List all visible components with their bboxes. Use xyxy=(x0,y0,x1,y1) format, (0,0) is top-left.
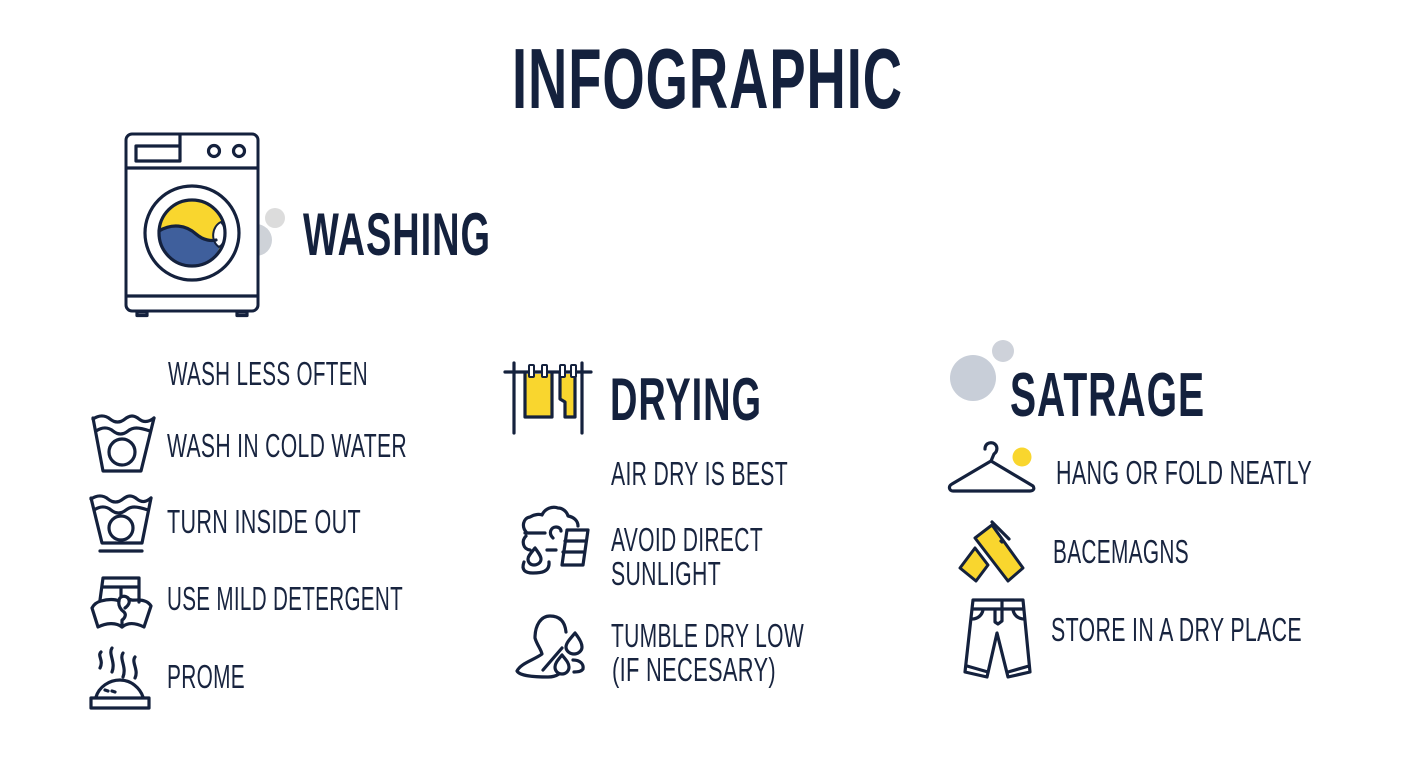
text: avoid direct sunlight: SUNLIGHT xyxy=(611,555,721,592)
icon: trousers xyxy=(965,600,1030,677)
icon: hands with garment xyxy=(92,578,151,627)
panel: storage xyxy=(949,340,1312,677)
icon: cloud and droplet xyxy=(523,507,588,573)
heading: washing: WASHING xyxy=(303,201,491,268)
icon: folded clothes xyxy=(960,522,1023,581)
text: wash less often: WASH LESS OFTEN xyxy=(168,355,368,392)
panel: washing xyxy=(91,134,491,708)
title: INFOGRAPHIC xyxy=(512,32,903,127)
text: tumble dry low: TUMBLE DRY LOW xyxy=(611,617,804,654)
icon: bubbles xyxy=(950,340,1014,401)
text: tumble dry low xyxy=(611,617,804,688)
text: use mild detergent: USE MILD DETERGENT xyxy=(167,580,403,617)
icon: wash basin xyxy=(93,416,154,471)
text: turn inside out: TURN INSIDE OUT xyxy=(167,503,361,540)
text: prome: PROME xyxy=(167,658,245,695)
text: wash in cold water: WASH IN COLD WATER xyxy=(167,427,407,464)
icon: person with droplets xyxy=(517,616,583,677)
heading: drying: DRYING xyxy=(610,366,762,433)
heading: satrage: SATRAGE xyxy=(1010,361,1205,430)
text: avoid direct sunlight xyxy=(611,521,763,592)
panel: drying xyxy=(505,363,804,688)
icon: clothesline xyxy=(505,363,591,433)
text: tumble dry low: (IF NECESARY) xyxy=(612,651,776,688)
text: air dry is best: AIR DRY IS BEST xyxy=(611,455,788,492)
text: avoid direct sunlight: AVOID DIRECT xyxy=(611,521,763,558)
text: bacemagns: BACEMAGNS xyxy=(1053,533,1189,570)
icon: hanger xyxy=(949,443,1034,491)
icon: steaming dish xyxy=(91,648,149,708)
icon: washing machine xyxy=(126,134,285,316)
icon: wash basin with bar xyxy=(91,496,151,551)
